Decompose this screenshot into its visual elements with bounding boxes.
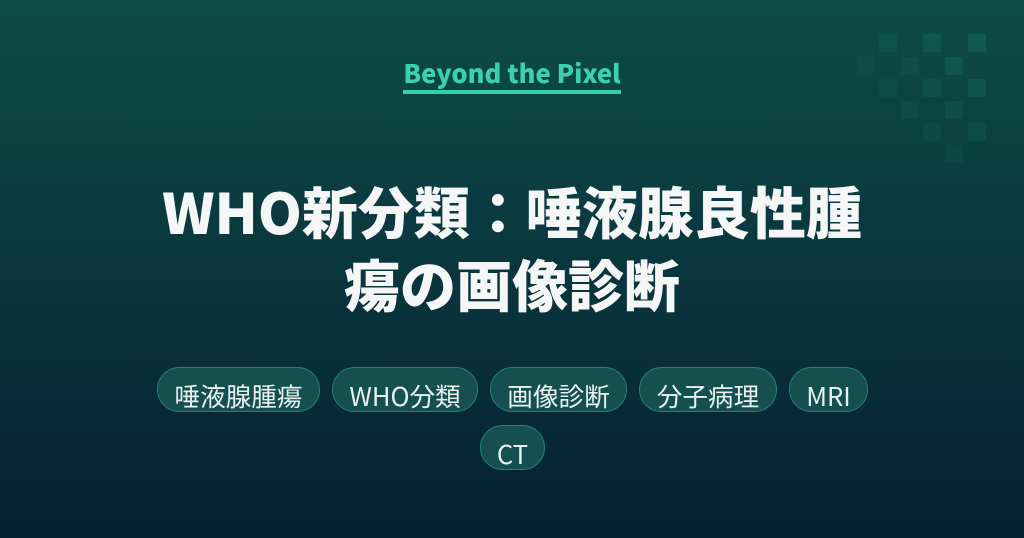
tag: 画像診断 — [490, 367, 627, 412]
tag: 唾液腺腫瘍: 唾液腺腫瘍 — [174, 377, 302, 414]
tag: MRI — [789, 367, 868, 412]
tag: WHO分類: WHO分類 — [349, 377, 461, 414]
tag: CT — [480, 425, 545, 470]
tag: CT: CT — [497, 435, 528, 472]
tag: 唾液腺腫瘍 — [157, 367, 320, 412]
tag: 画像診断: 画像診断 — [507, 377, 610, 414]
title — [162, 170, 862, 324]
tag: MRI: MRI — [806, 377, 851, 414]
title: 瘍の画像診断 — [344, 243, 680, 324]
brand label with underline: Beyond the Pixel — [403, 54, 621, 91]
tag: 分子病理 — [639, 367, 777, 412]
tags — [157, 367, 868, 472]
title: WHO新分類：唾液腺良性腫 — [162, 170, 862, 251]
decorative square pattern — [879, 34, 986, 141]
tag: 分子病理: 分子病理 — [657, 377, 759, 414]
tag: WHO分類 — [332, 367, 478, 412]
